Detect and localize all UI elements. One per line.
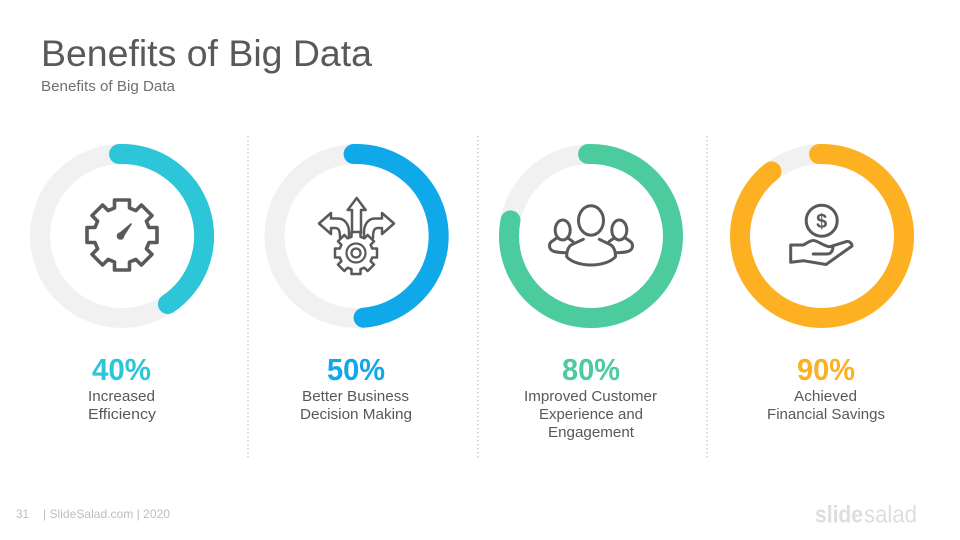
percentage: 40% [92, 352, 151, 387]
icon: hand holding coin [791, 205, 852, 264]
label [767, 388, 885, 423]
label [300, 388, 412, 423]
label [88, 388, 157, 423]
label: Efficiency [88, 406, 157, 423]
donut chart: 40% [40, 154, 204, 318]
label: Improved Customer [524, 388, 657, 405]
panel: improved customer experience [509, 154, 673, 441]
label: Increased [88, 388, 155, 405]
label [524, 388, 657, 441]
label: Experience and [539, 406, 643, 423]
subtitle: Benefits of Big Data [41, 79, 176, 95]
footer source: | SlideSalad.com | 2020 [43, 507, 170, 521]
panel: achieved financial savings [740, 154, 904, 423]
donut chart: 50% [274, 154, 439, 318]
percentage: 90% [797, 352, 855, 387]
label: Financial Savings [767, 406, 885, 423]
logo: slidesalad: salad [864, 502, 917, 528]
label: Achieved [794, 388, 857, 405]
icon: hand holding coin: $ [816, 211, 827, 233]
label: Decision Making [300, 406, 412, 423]
donut chart: 80% [509, 154, 673, 318]
percentage: 50% [327, 352, 385, 387]
label: Better Business [302, 388, 409, 405]
title: Benefits of Big Data [41, 33, 372, 74]
logo: slidesalad [815, 502, 917, 528]
icon: gear with gauge [87, 200, 157, 270]
panel: better business decision making [274, 154, 439, 423]
icon: group of people [549, 206, 633, 265]
panel: increased efficiency [40, 154, 204, 423]
footer page number: 31 [16, 507, 29, 521]
percentage: 80% [562, 352, 620, 387]
logo: slidesalad: slide [815, 502, 863, 528]
label: Engagement [548, 424, 635, 441]
donut chart: 90% [740, 154, 904, 318]
icon: arrows and gear [319, 198, 394, 274]
